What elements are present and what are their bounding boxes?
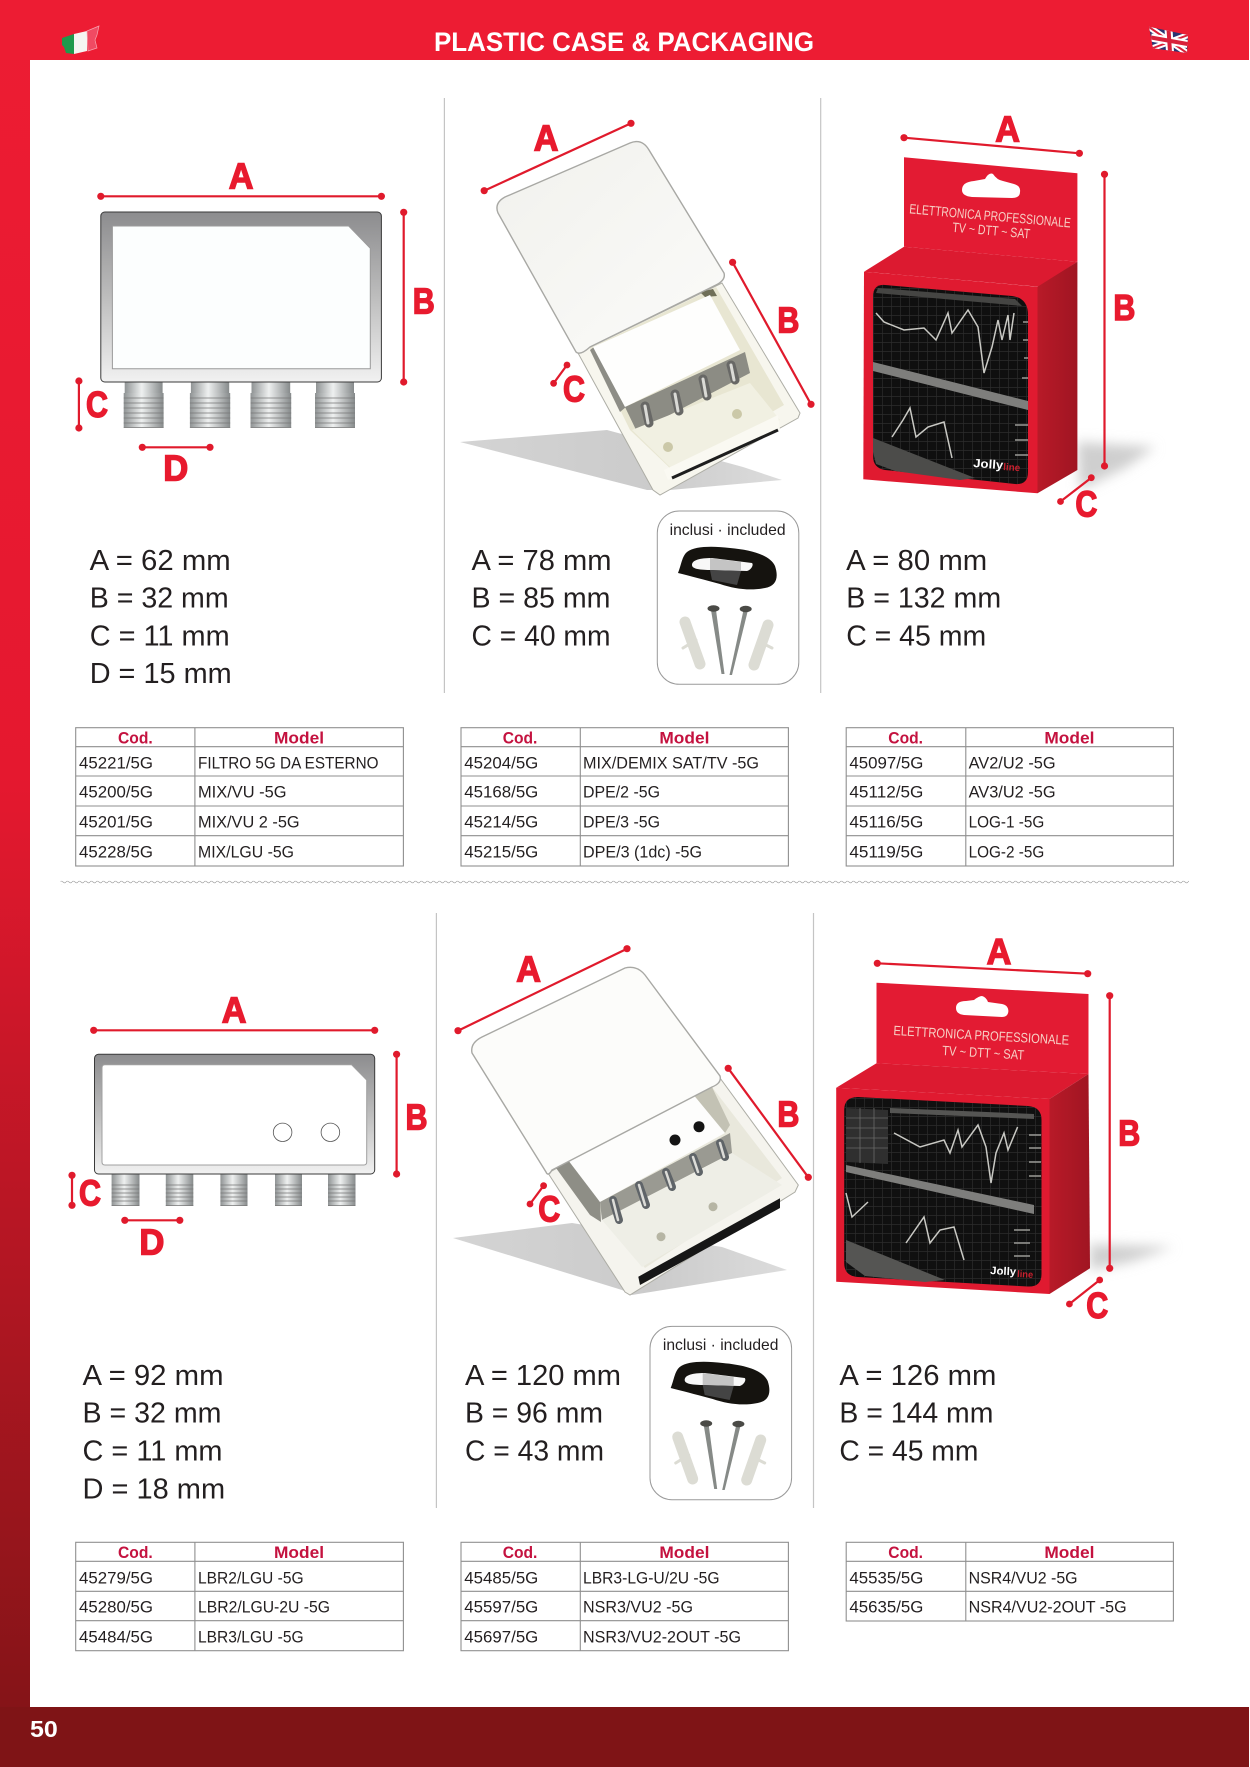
table: bottom centre: Cod.	[503, 1543, 537, 1562]
dimension C: C	[86, 384, 108, 425]
table: bottom right: Cod.	[888, 1543, 923, 1562]
dimension C	[68, 1172, 101, 1214]
table: top left: Model	[274, 728, 324, 747]
dimension B: B	[1113, 287, 1135, 328]
table: bottom right: 45635/5G	[849, 1599, 923, 1617]
dimension B	[400, 209, 435, 386]
dimension D: D	[163, 448, 188, 488]
box shadow	[1077, 442, 1155, 490]
measurements: panel 1: D = 15 mm	[90, 658, 232, 690]
measurements: panel 3: A = 80 mm	[846, 545, 987, 577]
measurements: panel 3: B = 132 mm	[846, 583, 1001, 615]
measurements: panel 5: A = 120 mm	[465, 1360, 621, 1392]
measurements: panel 4: A = 92 mm	[82, 1360, 224, 1392]
box shadow	[1090, 1244, 1173, 1270]
measurements: panel 3	[846, 545, 1001, 652]
table: bottom centre: LBR3-LG-U/2U -5G	[583, 1569, 720, 1587]
measurements: panel 2: C = 40 mm	[472, 620, 610, 652]
table: bottom centre: 45597/5G	[464, 1599, 538, 1617]
table: top left	[76, 728, 403, 866]
measurements: panel 5: C = 43 mm	[465, 1436, 604, 1468]
table: top left: Cod.	[118, 728, 153, 747]
dimension B: B	[406, 1096, 428, 1137]
dimension C: C	[538, 1188, 560, 1229]
table: top right: 45097/5G	[849, 754, 923, 772]
table: top left: FILTRO 5G DA ESTERNO	[198, 754, 379, 772]
table: top centre: 45204/5G	[464, 754, 538, 772]
table: top centre: MIX/DEMIX SAT/TV -5G	[583, 754, 759, 772]
table: top centre: DPE/3 (1dc) -5G	[583, 843, 702, 861]
table: top centre: 45168/5G	[464, 784, 538, 802]
table: bottom centre: NSR3/VU2 -5G	[583, 1599, 693, 1617]
dimension A: A	[222, 990, 246, 1031]
panel: top right packaging box	[863, 109, 1155, 525]
table: top left: MIX/VU 2 -5G	[198, 814, 300, 832]
panel: top centre open case photo	[460, 118, 815, 495]
measurements: panel 1	[90, 545, 232, 690]
measurements: panel 6	[839, 1360, 996, 1468]
table: top right: Model	[1044, 728, 1094, 747]
case body	[101, 212, 381, 382]
dimension C	[1057, 474, 1097, 525]
box hang tab	[904, 157, 1077, 262]
measurements: panel 2: B = 85 mm	[472, 583, 610, 615]
callout: included accessories, top: inclusi · included	[670, 522, 786, 539]
callout: included accessories, bottom: inclusi · included	[663, 1337, 778, 1354]
page number: 50	[30, 1716, 58, 1742]
measurements: panel 6: A = 126 mm	[839, 1360, 996, 1392]
box screen with charts: Jolly	[990, 1265, 1017, 1278]
table: bottom centre: Model	[659, 1543, 709, 1562]
box printed text: ELETTRONICA PROFESSIONALE	[909, 201, 1071, 230]
panel: bottom left case drawing	[68, 990, 428, 1262]
table: bottom left: Cod.	[118, 1543, 153, 1562]
dimension A: A	[995, 109, 1020, 150]
dimension C	[75, 377, 108, 432]
table: top centre	[461, 728, 788, 866]
icon: screws and wall plugs	[676, 1420, 765, 1490]
box screen with charts: line	[1017, 1269, 1033, 1281]
dimension A	[900, 109, 1083, 157]
dimension B: B	[1118, 1113, 1140, 1154]
dimension B	[725, 1065, 812, 1181]
box screen with charts: Jolly	[973, 456, 1004, 472]
table: bottom left	[76, 1542, 403, 1651]
measurements: panel 6: B = 144 mm	[839, 1398, 993, 1430]
box printed text: TV ~ DTT ~ SAT	[942, 1043, 1025, 1063]
dimension B: B	[413, 280, 435, 321]
measurements: panel 2	[472, 545, 612, 652]
table: top left: 45221/5G	[79, 754, 153, 772]
panel: bottom centre open case photo	[453, 945, 812, 1295]
box printed text: ELETTRONICA PROFESSIONALE	[893, 1023, 1070, 1048]
dimension C	[1066, 1277, 1108, 1326]
panel: top left case drawing	[75, 155, 435, 489]
case body	[94, 1054, 375, 1174]
table: top centre: Cod.	[503, 728, 537, 747]
lid	[497, 142, 724, 353]
table: top right: AV2/U2 -5G	[969, 754, 1056, 772]
dimension B: B	[777, 1094, 799, 1135]
title: PLASTIC CASE & PACKAGING	[434, 27, 814, 57]
measurements: panel 3: C = 45 mm	[846, 620, 986, 652]
icon: Italy flag map	[62, 26, 99, 54]
table: top centre: Model	[659, 728, 709, 747]
dimension B	[1101, 171, 1135, 470]
measurements: panel 5	[465, 1360, 621, 1468]
icon: cable coil	[671, 1362, 769, 1404]
dimension D	[139, 444, 214, 488]
table: top left: 45201/5G	[79, 814, 153, 832]
table: top right	[846, 728, 1173, 866]
table: top left: MIX/LGU -5G	[198, 843, 294, 861]
measurements: panel 5: B = 96 mm	[465, 1398, 603, 1430]
dimension B	[729, 259, 815, 408]
measurements: panel 1: B = 32 mm	[90, 583, 229, 615]
dimension A	[97, 155, 385, 200]
dimension C: C	[1075, 484, 1097, 525]
dimension A: A	[516, 949, 541, 990]
dimension C	[550, 362, 585, 409]
table: bottom left: 45484/5G	[79, 1629, 153, 1647]
box screen with charts	[873, 285, 1028, 484]
table: top right: 45116/5G	[849, 814, 923, 832]
table: top left: MIX/VU -5G	[198, 784, 286, 802]
table: top right: LOG-2 -5G	[969, 843, 1044, 861]
measurements: panel 2: A = 78 mm	[472, 545, 612, 577]
lid	[472, 967, 720, 1174]
table: bottom left: Model	[274, 1543, 324, 1562]
dimension A	[454, 945, 631, 1034]
shadow	[460, 430, 782, 490]
dimension D: D	[139, 1221, 164, 1262]
box printed text: TV ~ DTT ~ SAT	[952, 220, 1031, 241]
dimension A: A	[229, 155, 253, 196]
dimension A	[90, 990, 378, 1034]
icon: screws and wall plugs	[683, 605, 772, 675]
open case base	[548, 1078, 798, 1295]
shadow	[453, 1223, 787, 1295]
table: top right: Cod.	[888, 728, 923, 747]
table: bottom left: 45280/5G	[79, 1599, 153, 1617]
connectors	[124, 382, 355, 428]
dimension A	[481, 118, 635, 194]
measurements: panel 4: C = 11 mm	[82, 1436, 222, 1468]
callout: included accessories, top	[657, 511, 799, 684]
icon: cable coil	[678, 547, 777, 589]
table: bottom left: LBR3/LGU -5G	[198, 1629, 304, 1647]
table: bottom centre: 45485/5G	[464, 1569, 538, 1587]
table: bottom centre: 45697/5G	[464, 1629, 538, 1647]
dimension B: B	[777, 300, 799, 341]
box printed text	[893, 1023, 1070, 1063]
table: bottom right: Model	[1044, 1543, 1094, 1562]
table: bottom centre: NSR3/VU2-2OUT -5G	[583, 1629, 741, 1647]
box top and side	[836, 1063, 1090, 1294]
table: bottom left: LBR2/LGU -5G	[198, 1569, 304, 1587]
table: top centre: 45214/5G	[464, 814, 538, 832]
panel: bottom right packaging box	[836, 931, 1173, 1326]
box screen with charts	[844, 1097, 1042, 1287]
measurements: panel 6: C = 45 mm	[839, 1436, 978, 1468]
callout: included accessories, bottom	[650, 1326, 792, 1500]
table: top left: 45200/5G	[79, 784, 153, 802]
table: bottom right: NSR4/VU2 -5G	[969, 1569, 1078, 1587]
panel dividers	[436, 98, 821, 1508]
icon: UK flag	[1149, 26, 1188, 53]
box printed text	[909, 201, 1071, 241]
dimension C	[527, 1182, 560, 1229]
measurements: panel 1: A = 62 mm	[90, 545, 231, 577]
table: top centre: DPE/2 -5G	[583, 784, 660, 802]
connectors	[112, 1174, 355, 1206]
dimension B	[393, 1051, 428, 1178]
dimension C: C	[1086, 1285, 1108, 1326]
dimension B	[1106, 992, 1140, 1272]
table: bottom left: 45279/5G	[79, 1569, 153, 1587]
measurements: panel 4	[82, 1360, 225, 1505]
table: top right: 45112/5G	[849, 784, 923, 802]
open case base	[578, 283, 800, 495]
table: bottom left: LBR2/LGU-2U -5G	[198, 1599, 330, 1617]
table: top right: 45119/5G	[849, 843, 923, 861]
dimension C: C	[563, 368, 585, 409]
measurements: panel 4: D = 18 mm	[82, 1473, 225, 1505]
dimension A: A	[534, 118, 558, 159]
table: top right: AV3/U2 -5G	[969, 784, 1056, 802]
dimension D	[121, 1217, 183, 1262]
table: bottom centre	[461, 1542, 788, 1651]
box hang tab	[876, 983, 1088, 1074]
dimension A	[874, 931, 1091, 977]
table: top centre: DPE/3 -5G	[583, 814, 660, 832]
table: bottom right: NSR4/VU2-2OUT -5G	[969, 1599, 1127, 1617]
table: top left: 45228/5G	[79, 843, 153, 861]
measurements: panel 1: C = 11 mm	[90, 620, 230, 652]
box top and side	[863, 247, 1077, 493]
dimension A: A	[987, 931, 1011, 972]
table: top centre: 45215/5G	[464, 843, 538, 861]
dimension C: C	[79, 1172, 101, 1214]
table: bottom right: 45535/5G	[849, 1569, 923, 1587]
table: top right: LOG-1 -5G	[969, 814, 1044, 832]
table: bottom right	[846, 1542, 1173, 1621]
measurements: panel 4: B = 32 mm	[82, 1398, 222, 1430]
box screen with charts: line	[1003, 462, 1021, 474]
